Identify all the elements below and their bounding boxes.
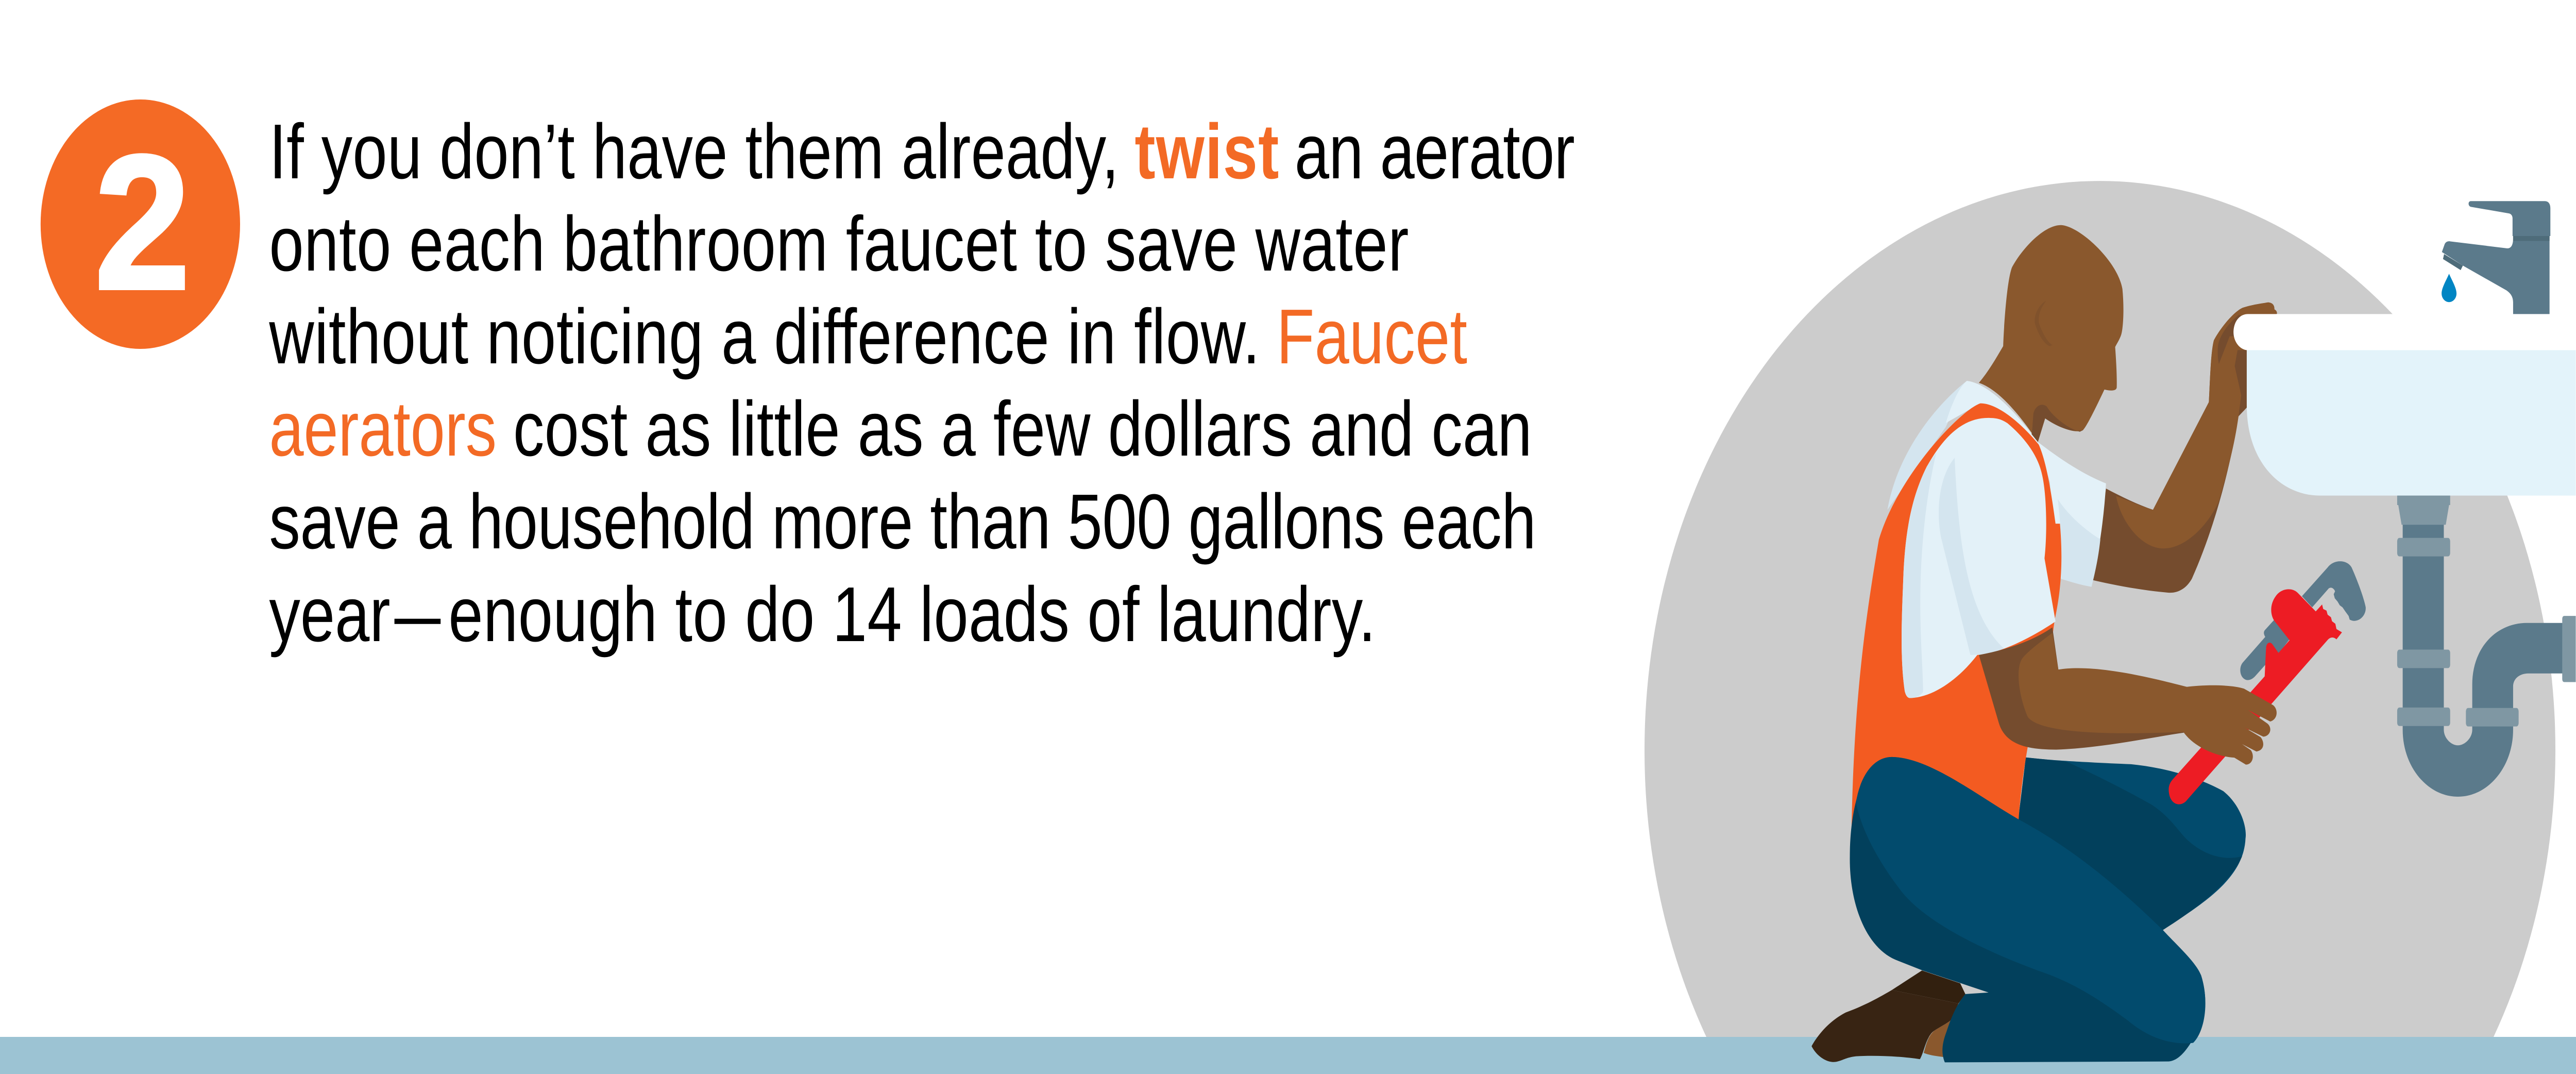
boot [1811, 970, 1965, 1062]
body text: without noticing a difference in flow. [269, 293, 1260, 380]
body text: aerators [269, 385, 497, 472]
body text: onto each bathroom faucet to save water [269, 200, 1409, 287]
floor band [0, 1037, 2576, 1074]
number badge: 2 [94, 115, 191, 330]
body text: an aerator [1295, 108, 1575, 195]
gripping hand [2171, 685, 2277, 765]
drain pipe [2397, 496, 2576, 797]
body text: Faucet [1277, 293, 1467, 380]
body text: If you don’t have them already, [269, 108, 1119, 195]
pipe wrench [2168, 561, 2366, 804]
illustration: worker fixing sink [1811, 201, 2576, 1062]
body text: year [269, 570, 391, 658]
body text: cost as little as a few dollars and can [513, 385, 1532, 472]
body text: twist [1134, 108, 1279, 195]
far raised arm [2092, 303, 2277, 593]
body text: save a household more than 500 gallons each [269, 478, 1536, 565]
far leg [2019, 758, 2246, 930]
grey background circle [1645, 181, 2555, 1037]
body text: — [395, 570, 440, 658]
number badge [41, 99, 240, 349]
torso: vest and shirt [1851, 381, 2106, 916]
head and neck [1979, 225, 2124, 442]
body text: enough to do 14 loads of laundry. [448, 570, 1376, 658]
faucet with water drop [2442, 201, 2550, 314]
body text [269, 108, 1575, 658]
sink basin [2233, 314, 2576, 496]
near leg [1850, 757, 2206, 1062]
near arm [1979, 627, 2214, 750]
